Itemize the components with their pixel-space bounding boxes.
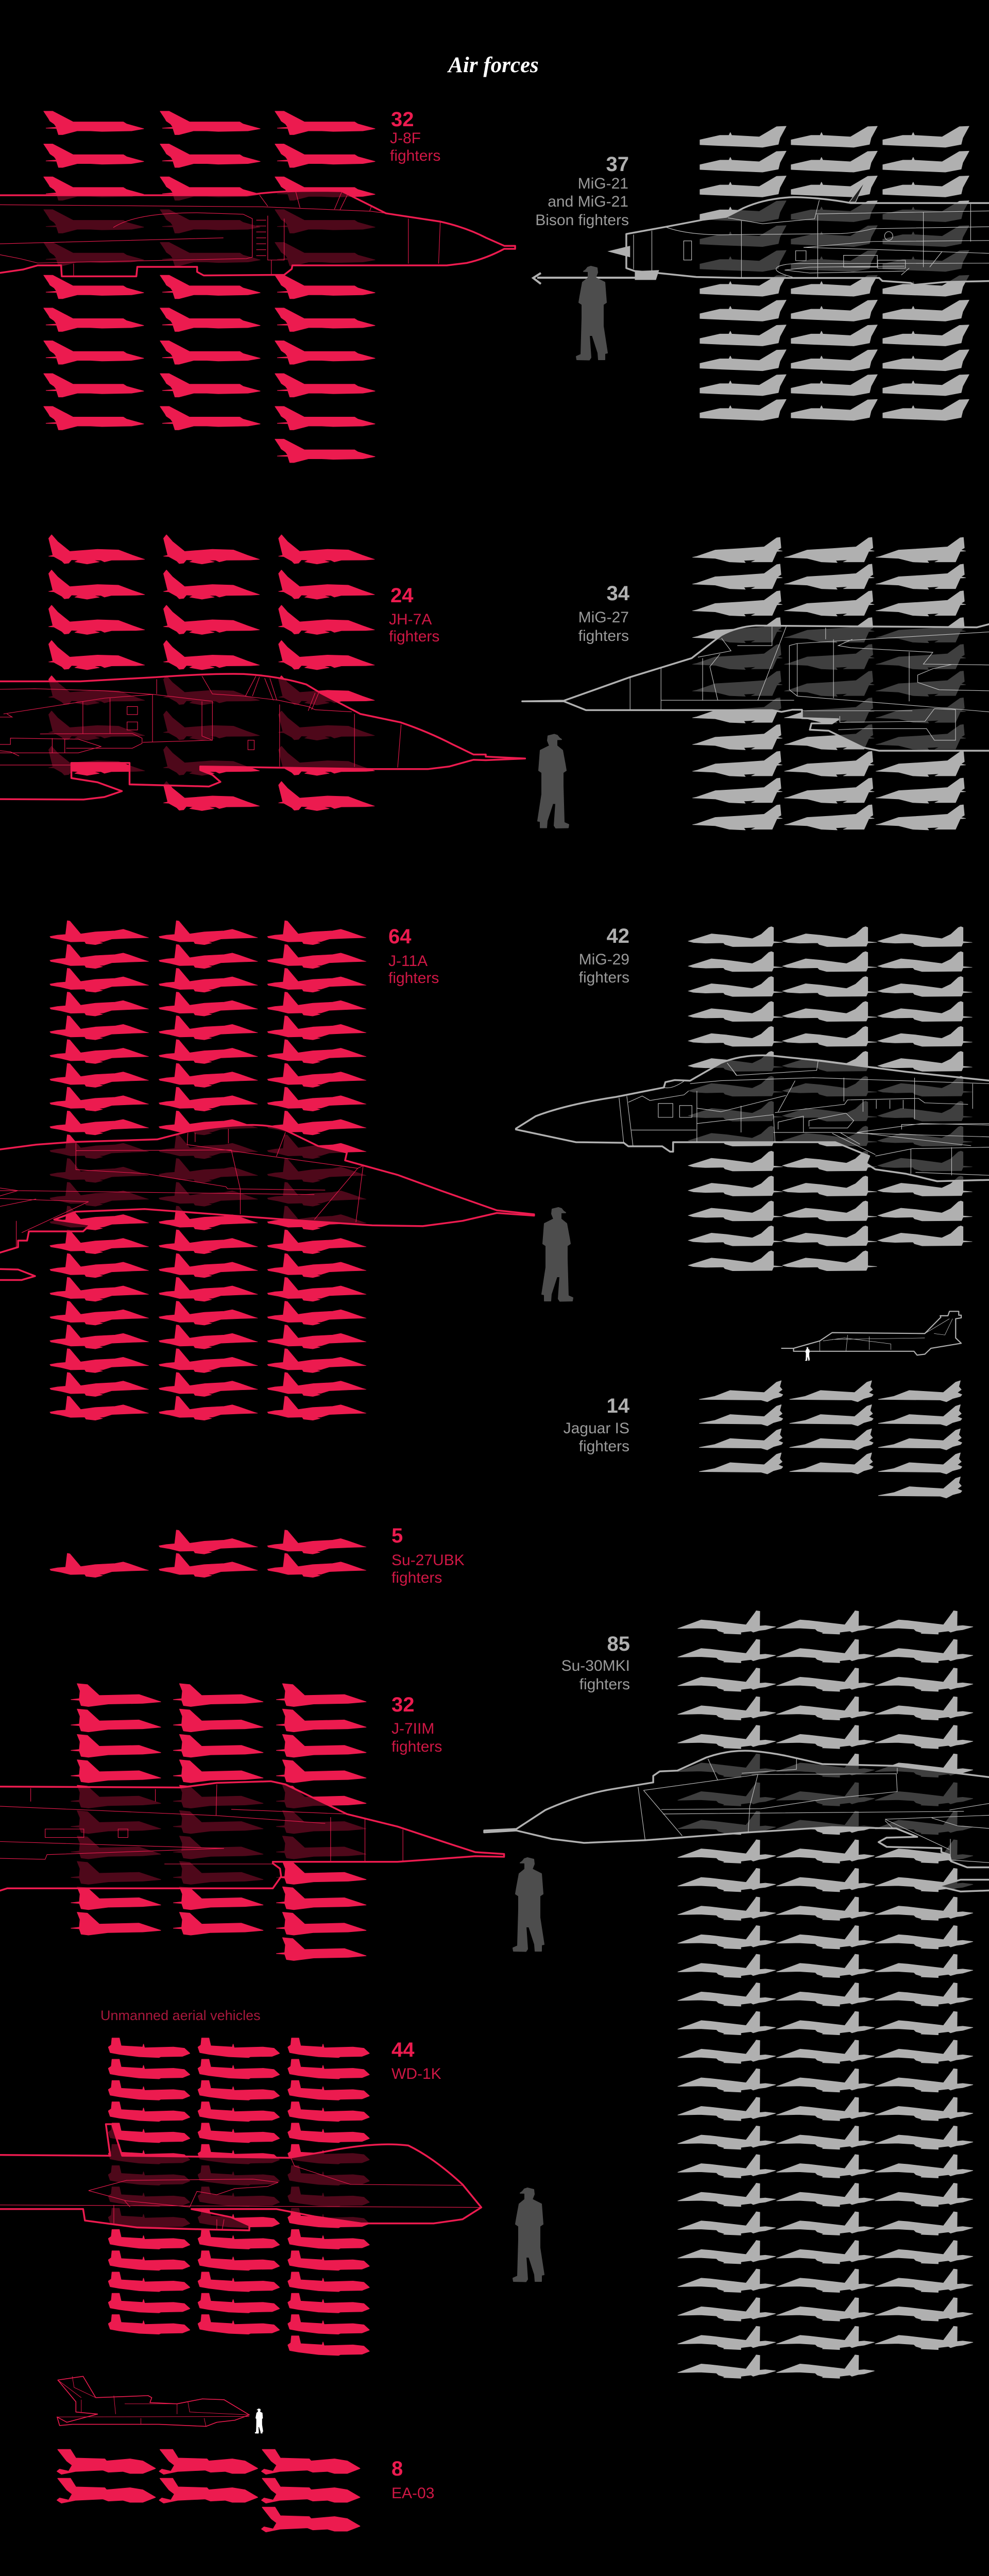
section heading: unmanned aerial vehicles: Unmanned aerial vehicles <box>100 2008 261 2023</box>
label: 24 JH-7A fighters <box>389 584 439 645</box>
unit grid: J-11A fighters <box>50 921 366 1420</box>
label: 64 J-11A fighters <box>388 925 439 987</box>
unit grid: J-7IIM fighters <box>71 1684 366 1960</box>
label: 24 JH-7A fighters: fighters <box>389 628 439 645</box>
label: 34 MiG-27 fighters: fighters <box>578 628 629 645</box>
aircraft outline: Jaguar IS <box>781 1311 961 1355</box>
label: 14 Jaguar IS fighters <box>564 1395 630 1455</box>
arrow: length extension of MiG-21 <box>533 273 635 284</box>
label: 5 Su-27UBK fighters: 5 <box>391 1524 403 1547</box>
label: 85 Su-30MKI fighters <box>561 1633 630 1693</box>
person marker beside EA-03 <box>255 2409 263 2433</box>
label: 34 MiG-27 fighters <box>578 582 630 645</box>
aircraft outline: J-11A <box>0 1125 534 1280</box>
unit grid: J-8F fighters <box>44 111 375 463</box>
unit grid: Su-30MKI fighters <box>678 1611 973 2378</box>
label: 32 J-7IIM fighters: J-7IIM <box>391 1720 434 1737</box>
aircraft outline: MiG-29 <box>516 1055 989 1181</box>
aircraft outline: Su-30MKI <box>484 1751 989 1891</box>
label: 34 MiG-27 fighters: MiG-27 <box>578 609 629 626</box>
label: 32 J-7IIM fighters <box>391 1693 442 1755</box>
label: 37 MiG-21 and MiG-21 Bison fighters: and MiG-21 <box>548 193 628 210</box>
label: 5 Su-27UBK fighters: fighters <box>391 1569 442 1586</box>
label: 42 MiG-29 fighters <box>579 925 629 986</box>
label: 37 MiG-21 and MiG-21 Bison fighters: MiG-21 <box>578 175 628 192</box>
label: 42 MiG-29 fighters: fighters <box>579 969 629 986</box>
unit grid: MiG-29 fighters <box>688 926 972 1271</box>
person silhouette scale 4 <box>513 1858 544 1952</box>
label: 42 MiG-29 fighters: 42 <box>607 925 629 947</box>
person marker beside Jaguar <box>805 1347 810 1361</box>
person silhouette scale 3 <box>542 1208 573 1301</box>
label: 5 Su-27UBK fighters <box>391 1524 465 1586</box>
label: 32 J-8F fighters: fighters <box>390 147 440 164</box>
label: 34 MiG-27 fighters: 34 <box>607 582 630 605</box>
unit grid: JH-7A fighters <box>49 535 374 811</box>
aircraft outline: JH-7A <box>0 674 525 800</box>
label: 37 MiG-21 and MiG-21 Bison fighters <box>535 153 629 229</box>
label: 32 J-8F fighters <box>390 108 440 164</box>
unit grid: WD-1K <box>108 2038 369 2355</box>
aircraft outline: EA-03 <box>57 2376 249 2427</box>
aircraft outline: WD-1K <box>0 2124 481 2230</box>
aircraft outline: J-8F <box>0 191 515 276</box>
label: 64 J-11A fighters: J-11A <box>388 953 428 970</box>
label: 32 J-7IIM fighters: fighters <box>391 1738 442 1755</box>
person silhouette scale 2 <box>538 735 569 828</box>
person silhouette scale 1 <box>576 266 607 360</box>
aircraft outline: MiG-27 <box>522 622 989 751</box>
label: 8 EA-03: EA-03 <box>391 2485 434 2502</box>
label: 8 EA-03 <box>391 2458 434 2502</box>
aircraft outline: J-7IIM <box>0 1781 504 1892</box>
label: 24 JH-7A fighters: JH-7A <box>389 611 432 628</box>
label: 32 J-8F fighters: 32 <box>391 108 414 131</box>
label: 32 J-8F fighters: J-8F <box>390 130 421 147</box>
unit grid: Su-27UBK fighters <box>50 1530 366 1578</box>
label: 37 MiG-21 and MiG-21 Bison fighters: 37 <box>606 153 629 176</box>
aircraft outline: MiG-21 <box>607 181 989 285</box>
label: 24 JH-7A fighters: 24 <box>390 584 414 607</box>
unit grid: Jaguar IS fighters <box>700 1381 962 1498</box>
label: 37 MiG-21 and MiG-21 Bison fighters: Bison fighters <box>535 212 629 229</box>
label: 85 Su-30MKI fighters: Su-30MKI <box>561 1657 630 1674</box>
unit grid: MiG-27 fighters <box>693 537 965 830</box>
label: 42 MiG-29 fighters: MiG-29 <box>579 951 629 968</box>
label: 44 WD-1K: 44 <box>391 2039 415 2061</box>
label: 44 WD-1K: WD-1K <box>391 2065 441 2082</box>
label: 32 J-7IIM fighters: 32 <box>391 1693 414 1716</box>
unit grid: EA-03 <box>57 2450 360 2532</box>
label: 44 WD-1K <box>391 2039 441 2082</box>
label: 64 J-11A fighters: 64 <box>388 925 412 948</box>
label: 14 Jaguar IS fighters: Jaguar IS <box>564 1420 629 1437</box>
label: 85 Su-30MKI fighters: 85 <box>607 1633 630 1655</box>
label: 64 J-11A fighters: fighters <box>388 970 439 987</box>
unit grid: MiG-21 fighters <box>700 126 969 420</box>
label: 14 Jaguar IS fighters: fighters <box>579 1438 629 1455</box>
person silhouette scale 5 <box>513 2188 544 2281</box>
label: 14 Jaguar IS fighters: 14 <box>607 1395 630 1417</box>
title: Air forces <box>447 53 539 77</box>
label: 85 Su-30MKI fighters: fighters <box>579 1676 630 1693</box>
label: 5 Su-27UBK fighters: Su-27UBK <box>391 1552 465 1569</box>
label: 8 EA-03: 8 <box>391 2458 403 2480</box>
